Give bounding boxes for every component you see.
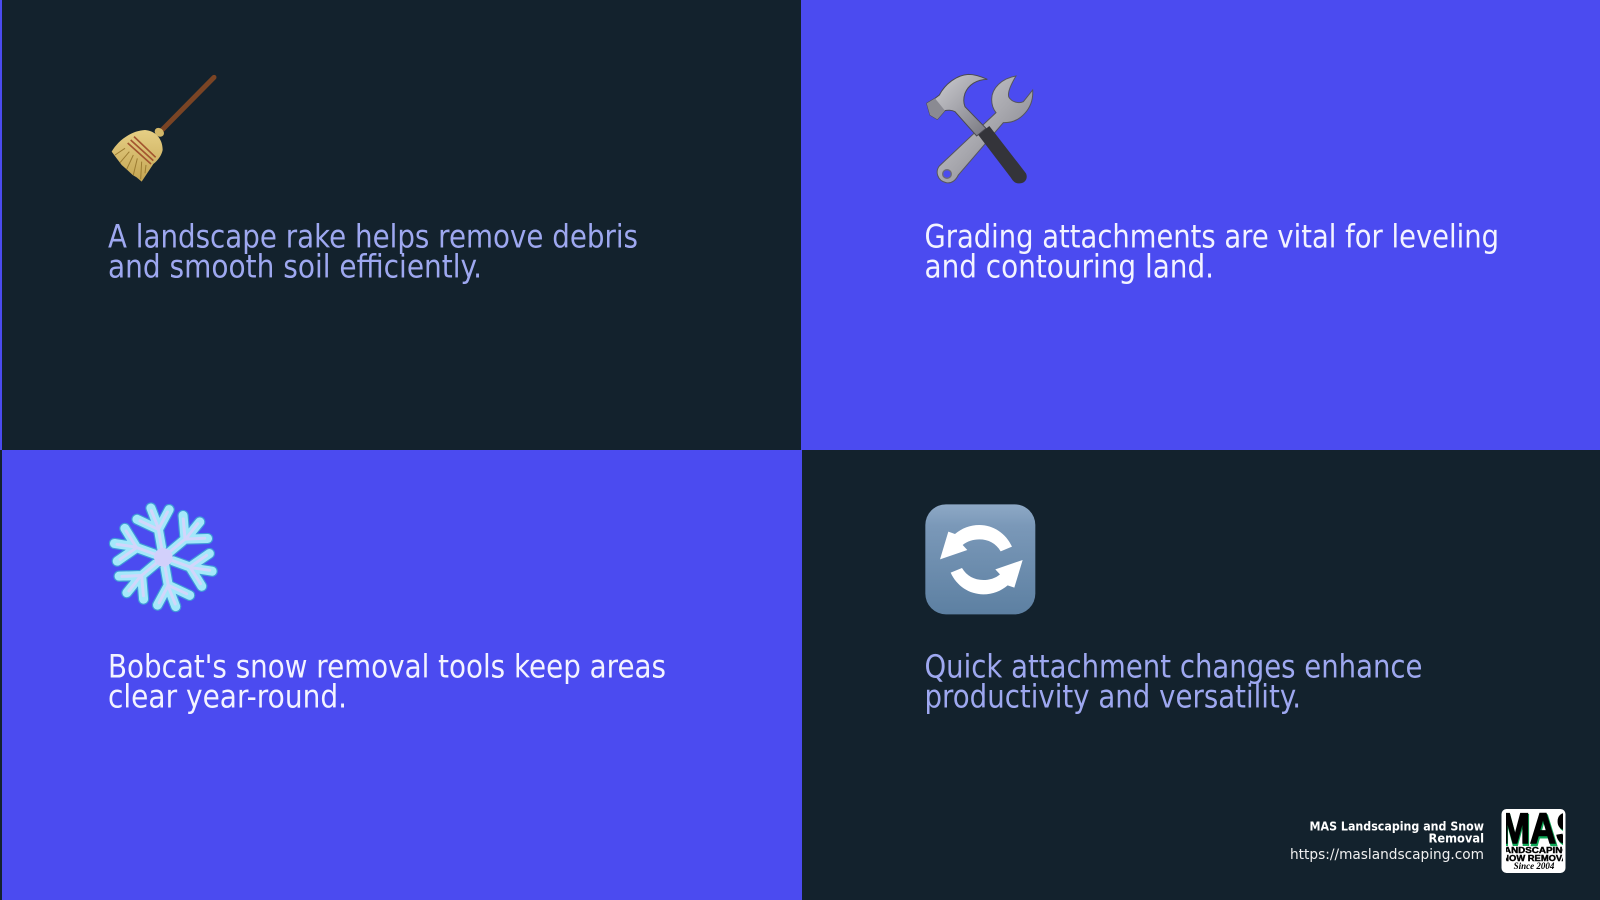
text: rake description: A landscape rake helps remove debris — [108, 218, 638, 256]
text: company name: Removal — [1428, 830, 1484, 846]
panel: quick attachment changes — [925, 504, 1566, 873]
text: snow description: clear year-round. — [108, 678, 347, 716]
icon: sync arrows — [925, 504, 1035, 614]
logo — [1502, 809, 1566, 873]
logo: Since 2004 — [1514, 861, 1555, 871]
panel: snow removal — [0, 450, 802, 900]
footer: company credit — [1291, 809, 1566, 873]
text: grading description: and contouring land. — [924, 248, 1214, 286]
logo: MAS — [1500, 806, 1582, 855]
icon: snowflake — [109, 505, 218, 610]
icon: broom — [112, 77, 214, 182]
text: website url: https://maslandscaping.com — [1290, 847, 1484, 863]
text: quick change description: Quick attachment changes enhance — [924, 648, 1422, 686]
logo: MAS — [1500, 805, 1580, 853]
text: quick change description: productivity and versatility. — [924, 678, 1301, 716]
text: rake description: and smooth soil efficiently. — [108, 248, 482, 286]
icon: hammer and wrench — [927, 74, 1033, 183]
logo: SNOW REMOVAL — [1496, 853, 1574, 863]
panel: grading attachments — [801, 0, 1600, 450]
panel: landscape rake — [0, 0, 801, 450]
text: company name: MAS Landscaping and Snow — [1310, 818, 1484, 834]
logo: LANDSCAPING — [1498, 845, 1570, 855]
text: grading description: Grading attachments are vital for leveling — [924, 218, 1499, 256]
text: snow description: Bobcat's snow removal tools keep areas — [108, 648, 666, 686]
